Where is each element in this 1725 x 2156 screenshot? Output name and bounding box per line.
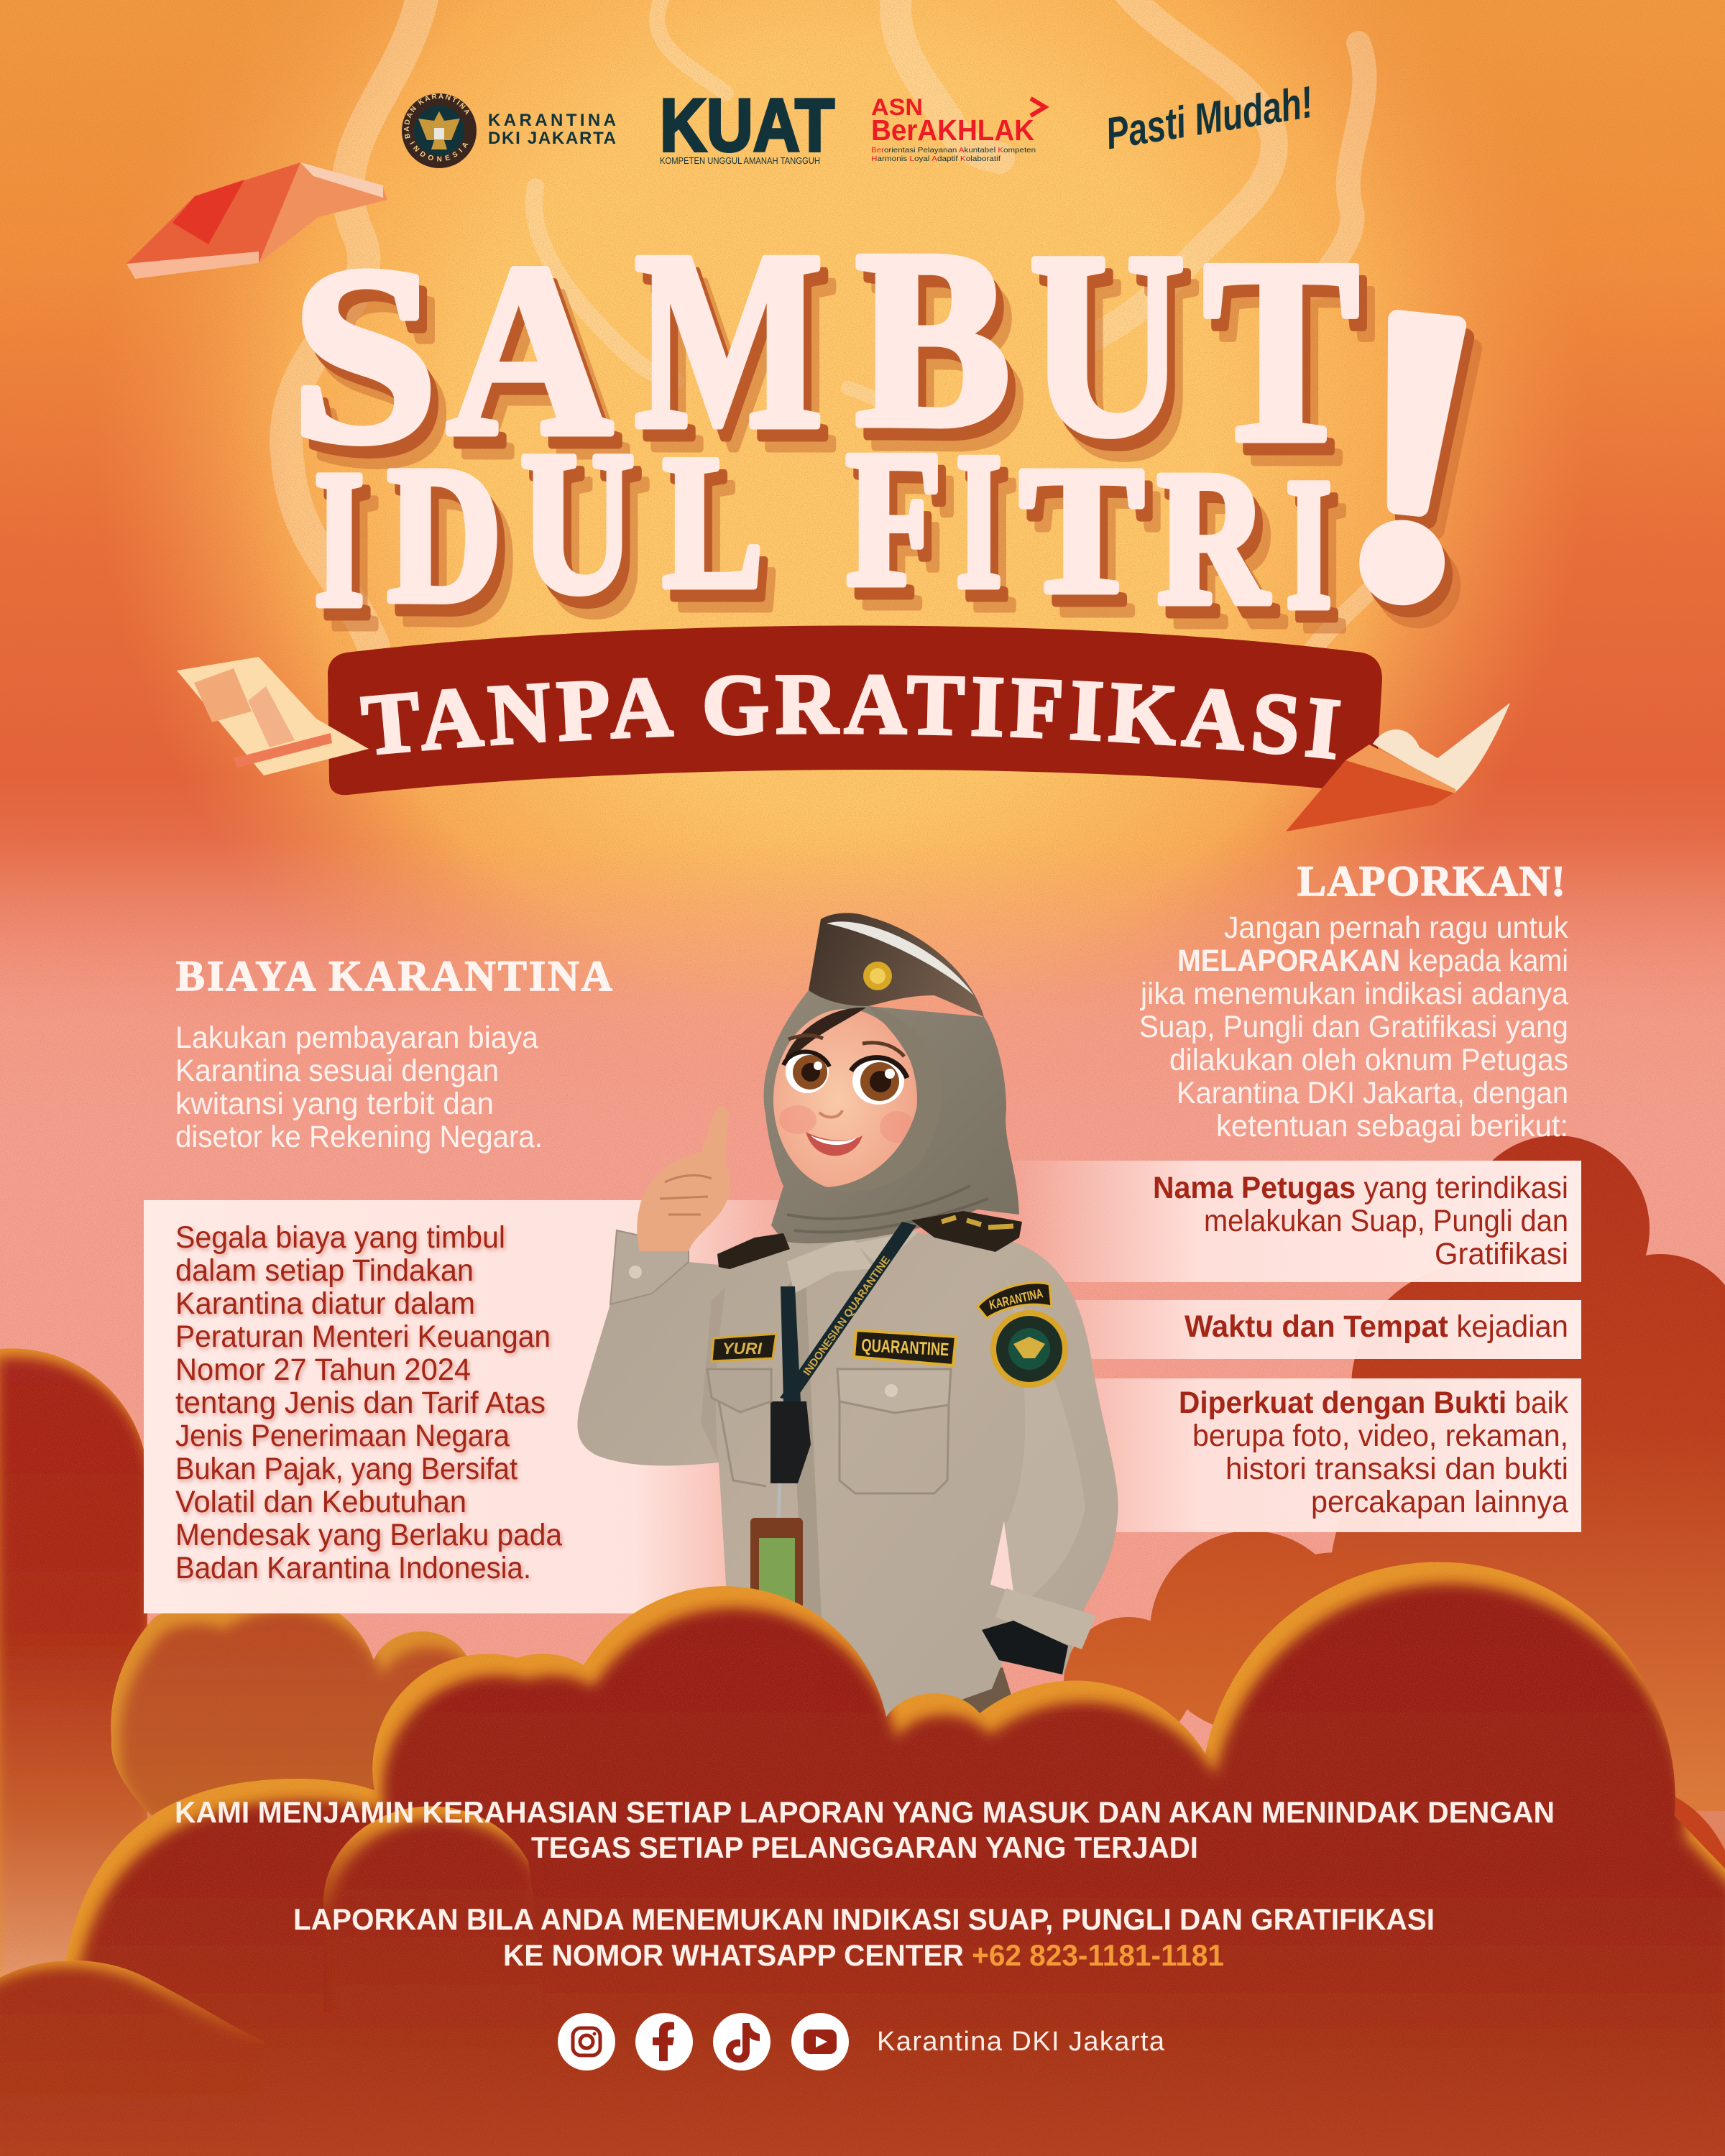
title: SAMBUT IDUL FITRI!: I: [314, 430, 364, 647]
text: item bukti: histori transaksi dan bukti: [1225, 1452, 1568, 1486]
icon: facebook: [635, 2013, 693, 2070]
pants: [880, 1667, 1021, 1725]
cuff and sleeve: [610, 1230, 689, 1304]
shirt placket and collar: [787, 1265, 827, 1725]
character: officer in uniform and hijab: INDONESIAN QUARANTINE: [801, 1254, 893, 1378]
logo: ASN BerAKHLAK: ASN: [871, 94, 923, 120]
shirt body: [577, 1233, 1118, 1725]
text: confidentiality statement: [175, 1795, 1555, 1864]
heading: Laporkan: LAPORKAN!: [1297, 857, 1565, 905]
logo wordmark: [488, 111, 616, 148]
text: regulation note: dalam setiap Tindakan: [175, 1253, 474, 1288]
title: SAMBUT IDUL FITRI!: T: [1020, 429, 1144, 630]
ribbon banner: [328, 625, 1382, 795]
logo: KUAT: KUAT: [660, 84, 834, 167]
text: confidentiality statement: TEGAS SETIAP PELANGGARAN YANG TERJADI: [531, 1830, 1198, 1864]
scarf folds: [787, 1186, 988, 1232]
text: regulation note: Mendesak yang Berlaku pada: [175, 1518, 562, 1552]
text: regulation note: Bukan Pajak, yang Bersifat: [175, 1452, 518, 1486]
panel: right item 2 background: [992, 1300, 1581, 1359]
title: SAMBUT IDUL FITRI!: T: [1203, 206, 1359, 497]
title: SAMBUT IDUL FITRI!: A: [447, 213, 612, 487]
title: SAMBUT IDUL FITRI!: [291, 198, 1506, 686]
text: laporkan description: [1139, 911, 1568, 1143]
clouds: inner bump with gold rim: [323, 1806, 533, 1917]
text: item bukti: berupa foto, video, rekaman,: [1192, 1419, 1568, 1453]
tagline: Pasti Mudah!: Pasti Mudah!: [1103, 78, 1316, 159]
rolled cuff right: [995, 1588, 1096, 1649]
text: whatsapp call to action: KE NOMOR WHATSAPP CENTER +62 823-1181-1181: [503, 1938, 1224, 1972]
title: SAMBUT IDUL FITRI!: I: [956, 413, 1002, 628]
open book illustration right: [1286, 703, 1510, 831]
smart watch: [982, 1621, 1068, 1674]
text: item nama petugas: Gratifikasi: [1435, 1237, 1568, 1271]
title: SAMBUT IDUL FITRI!: I: [1286, 441, 1332, 648]
icon: youtube: [791, 2013, 849, 2070]
text: regulation note: tentang Jenis dan Tarif Atas: [175, 1386, 546, 1420]
text: regulation note: Segala biaya yang timbul: [175, 1220, 505, 1255]
name tag QUARANTINE: QUARANTINE: [861, 1335, 949, 1360]
face: [773, 1009, 917, 1190]
ribbon text: TANPA GRATIFIKASI: [359, 674, 1341, 760]
icon: tiktok: [713, 2013, 770, 2070]
clouds: left background: [0, 1348, 466, 1978]
lanyard: [780, 1222, 916, 1401]
text: regulation note: Jenis Penerimaan Negara: [175, 1419, 510, 1453]
title: SAMBUT IDUL FITRI!: !: [1322, 218, 1506, 686]
text: item bukti: Diperkuat dengan Bukti baik: [1179, 1386, 1568, 1420]
icon: instagram: [558, 2013, 615, 2070]
logo: ASN BerAKHLAK: BerAKHLAK: [871, 114, 1034, 147]
logo wordmark: DKI JAKARTA: [488, 129, 616, 148]
text: laporkan description: ketentuan sebagai berikut:: [1216, 1109, 1568, 1143]
logo: ASN BerAKHLAK: [871, 94, 1045, 163]
text: item bukti: percakapan lainnya: [1311, 1485, 1568, 1519]
scarf and hijab: [763, 990, 1019, 1243]
text: laporkan description: jika menemukan indikasi adanya: [1139, 977, 1568, 1011]
book illustration top left: [126, 162, 387, 279]
logo: ASN BerAKHLAK: Berorientasi Pelayanan Akuntabel Kompeten: [871, 147, 1036, 155]
panel: right item 1 background: [992, 1161, 1581, 1282]
clouds: lower left foreground: [0, 1961, 263, 2048]
text: whatsapp call to action: [293, 1902, 1435, 1972]
badge KARANTINA arm patch: [978, 1283, 1052, 1318]
smoke swirls: [286, 0, 1409, 668]
text: laporkan description: MELAPORAKAN kepada kami: [1177, 944, 1568, 978]
shirt pockets: [707, 1369, 951, 1493]
emblem: INDONESIA: [410, 141, 469, 161]
character: officer in uniform and hijab: [577, 913, 1118, 1725]
logo: KUAT: KOMPETEN UNGGUL AMANAH TANGGUH: [660, 156, 820, 166]
text: item bukti: [1179, 1386, 1568, 1519]
text: laporkan description: Karantina DKI Jakarta, dengan: [1177, 1076, 1568, 1110]
text: biaya karantina description: Lakukan pembayaran biaya: [175, 1021, 538, 1055]
title: SAMBUT IDUL FITRI!: F: [846, 411, 942, 626]
text: confidentiality statement: KAMI MENJAMIN KERAHASIAN SETIAP LAPORAN YANG MASUK DAN AKAN MENINDAK DENGAN: [175, 1795, 1555, 1829]
text: laporkan description: Jangan pernah ragu untuk: [1224, 911, 1568, 945]
title: SAMBUT IDUL FITRI!: B: [855, 198, 1011, 479]
round arm patch: [990, 1310, 1068, 1388]
logo: ASN BerAKHLAK: Harmonis Loyal Adaptif Kolaboratif: [871, 155, 1000, 163]
name tag QUARANTINE: [854, 1330, 956, 1365]
logo wordmark: KARANTINA: [488, 111, 616, 130]
paper sheet illustration: [177, 657, 369, 775]
text: regulation note: Peraturan Menteri Keuangan: [175, 1319, 551, 1354]
text: item nama petugas: [1153, 1171, 1568, 1271]
nose and smile: [819, 1110, 842, 1117]
text: regulation note: Volatil dan Kebutuhan: [175, 1485, 466, 1519]
text: biaya karantina description: Karantina sesuai dengan: [175, 1054, 499, 1088]
eye left: [786, 1050, 829, 1093]
text: regulation note: Nomor 27 Tahun 2024: [175, 1353, 471, 1387]
name tag YURI: [712, 1334, 776, 1361]
text: biaya karantina description: [175, 1021, 543, 1154]
text: biaya karantina description: kwitansi yang terbit dan: [175, 1087, 494, 1121]
logo: Karantina DKI Jakarta: [402, 93, 616, 168]
heading: Biaya Karantina: BIAYA KARANTINA: [176, 952, 612, 1000]
text: laporkan description: dilakukan oleh oknum Petugas: [1169, 1043, 1568, 1077]
title: SAMBUT IDUL FITRI!: R: [1157, 431, 1270, 644]
clouds: right background: [1064, 1135, 1725, 1811]
ID card holder: [750, 1518, 803, 1611]
text: item waktu dan tempat: Waktu dan Tempat kejadian: [1184, 1309, 1568, 1344]
epaulette right: [911, 1211, 1022, 1252]
title: SAMBUT IDUL FITRI!: U: [520, 410, 635, 635]
arm shading: [1006, 1279, 1085, 1617]
text: regulation note: [175, 1220, 562, 1585]
title: SAMBUT IDUL FITRI!: M: [635, 199, 823, 481]
name tag YURI: YURI: [722, 1340, 763, 1358]
badge KARANTINA arm patch: KARANTINA: [988, 1286, 1044, 1312]
title: SAMBUT IDUL FITRI!: S: [291, 215, 438, 495]
hand with pointing finger: [637, 1106, 730, 1251]
title: SAMBUT IDUL FITRI!: L: [663, 417, 763, 627]
text: item nama petugas: melakukan Suap, Pungli dan: [1204, 1204, 1568, 1238]
text: social handle: Karantina DKI Jakarta: [877, 2027, 1165, 2057]
cap: [809, 913, 984, 1017]
text: biaya karantina description: disetor ke Rekening Negara.: [175, 1120, 543, 1154]
emblem: [402, 93, 477, 168]
panel: left info background: [144, 1200, 827, 1613]
clouds: right shoulder: [1509, 1786, 1725, 2156]
title: SAMBUT IDUL FITRI!: U: [1029, 198, 1185, 490]
panel: right item 3 background: [992, 1378, 1581, 1532]
text: whatsapp call to action: LAPORKAN BILA ANDA MENEMUKAN INDIKASI SUAP, PUNGLI DAN GRATIFIKASI: [293, 1902, 1435, 1936]
text: laporkan description: Suap, Pungli dan Gratifikasi yang: [1139, 1010, 1568, 1044]
text: regulation note: Badan Karantina Indonesia.: [175, 1551, 531, 1585]
title: SAMBUT IDUL FITRI!: D: [387, 426, 502, 642]
epaulette left: [717, 1233, 790, 1269]
text: item nama petugas: Nama Petugas yang terindikasi: [1153, 1171, 1568, 1205]
emblem: BADAN KARANTINA: [404, 93, 469, 139]
hair: [783, 1008, 866, 1064]
clouds: foreground main: [0, 1562, 1725, 2156]
text: regulation note: Karantina diatur dalam: [175, 1286, 475, 1321]
eye right: [852, 1057, 904, 1105]
